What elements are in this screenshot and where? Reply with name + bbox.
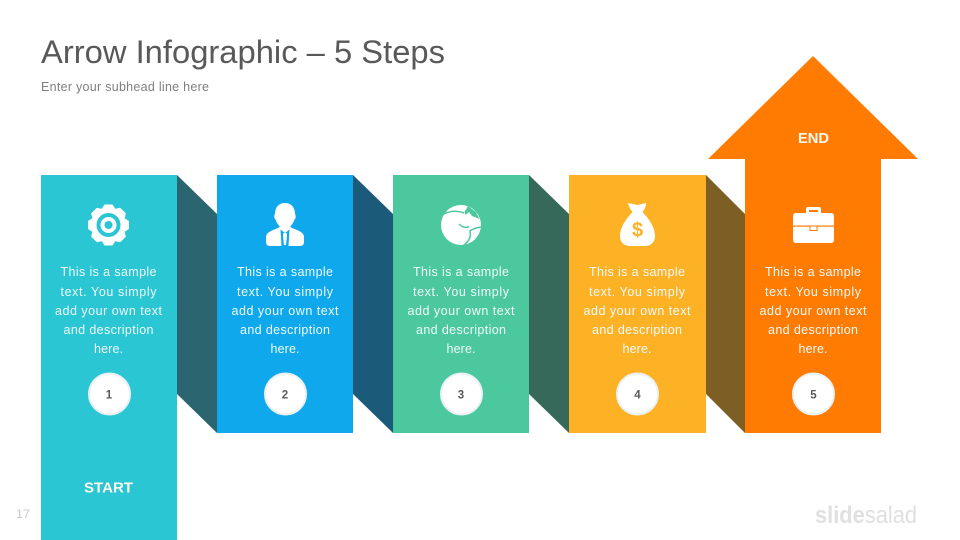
connector 3 to 4 — [529, 175, 569, 433]
text block: step 1: and description — [64, 323, 154, 337]
text block: step 3: add your own text — [408, 304, 515, 318]
text block: step 5: and description — [768, 323, 858, 337]
text block: step 4 — [584, 265, 691, 356]
text block: step 4: This is a sample — [589, 265, 685, 279]
text block: step 5: text. You simply — [765, 285, 862, 299]
connector 4 to 5 — [706, 175, 745, 433]
text block: step 5 — [760, 265, 867, 356]
icon: briefcase — [793, 207, 834, 243]
text block: step 4: here. — [622, 342, 652, 356]
text block: step 1: This is a sample — [60, 265, 157, 279]
panel: step 2 — [217, 175, 353, 433]
text block: step 1 — [55, 265, 163, 356]
text block: step 2: text. You simply — [237, 285, 334, 299]
number badge 3: 3 — [458, 390, 464, 402]
text block: step 3: This is a sample — [413, 265, 509, 279]
text block: step 1: here. — [94, 342, 123, 356]
text block: step 2: and description — [240, 323, 330, 337]
title: Arrow Infographic – 5 Steps — [41, 34, 445, 70]
text block: step 2: This is a sample — [237, 265, 333, 279]
start label: START — [84, 480, 133, 496]
text block: step 4: add your own text — [584, 304, 691, 318]
icon: businessman — [266, 203, 304, 246]
number badge 4: 4 — [634, 390, 641, 402]
panel: step 3 — [393, 175, 529, 433]
icon: gear — [89, 206, 128, 244]
connector 2 to 3 — [353, 175, 393, 433]
text block: step 5: here. — [798, 342, 828, 356]
text block: step 5: This is a sample — [765, 265, 861, 279]
panel: step 4 — [569, 175, 706, 433]
text block: step 5: add your own text — [760, 304, 867, 318]
text block: step 2 — [232, 265, 339, 356]
number badge 5: 5 — [810, 390, 817, 402]
number badge 1 — [89, 374, 130, 414]
panel: step 1 — [41, 175, 177, 540]
icon: money bag — [620, 203, 655, 246]
text block: step 2: add your own text — [232, 304, 339, 318]
icon: globe — [441, 205, 481, 246]
panel: step 5 arrow — [708, 56, 918, 433]
subhead: Enter your subhead line here — [41, 80, 209, 94]
end label: END — [798, 130, 829, 147]
text block: step 4: text. You simply — [589, 285, 686, 299]
text block: step 3 — [408, 265, 515, 356]
connector 1 to 2 — [177, 175, 217, 433]
text block: step 3: here. — [446, 342, 476, 356]
number badge 1: 1 — [106, 390, 113, 402]
text block: step 3: text. You simply — [413, 285, 510, 299]
text block: step 4: and description — [592, 323, 682, 337]
logo: slidesalad: slidesalad — [815, 502, 917, 529]
number badge 2: 2 — [282, 390, 288, 402]
number badge 2 — [265, 374, 306, 414]
text block: step 1: add your own text — [55, 304, 163, 318]
text block: step 3: and description — [416, 323, 506, 337]
text block: step 1: text. You simply — [60, 285, 157, 299]
number badge 4 — [617, 374, 658, 414]
icon: money bag: $ — [632, 220, 643, 242]
text block: step 2: here. — [270, 342, 300, 356]
page number: 17 — [16, 507, 30, 521]
number badge 5 — [793, 374, 834, 414]
number badge 3 — [441, 374, 482, 414]
